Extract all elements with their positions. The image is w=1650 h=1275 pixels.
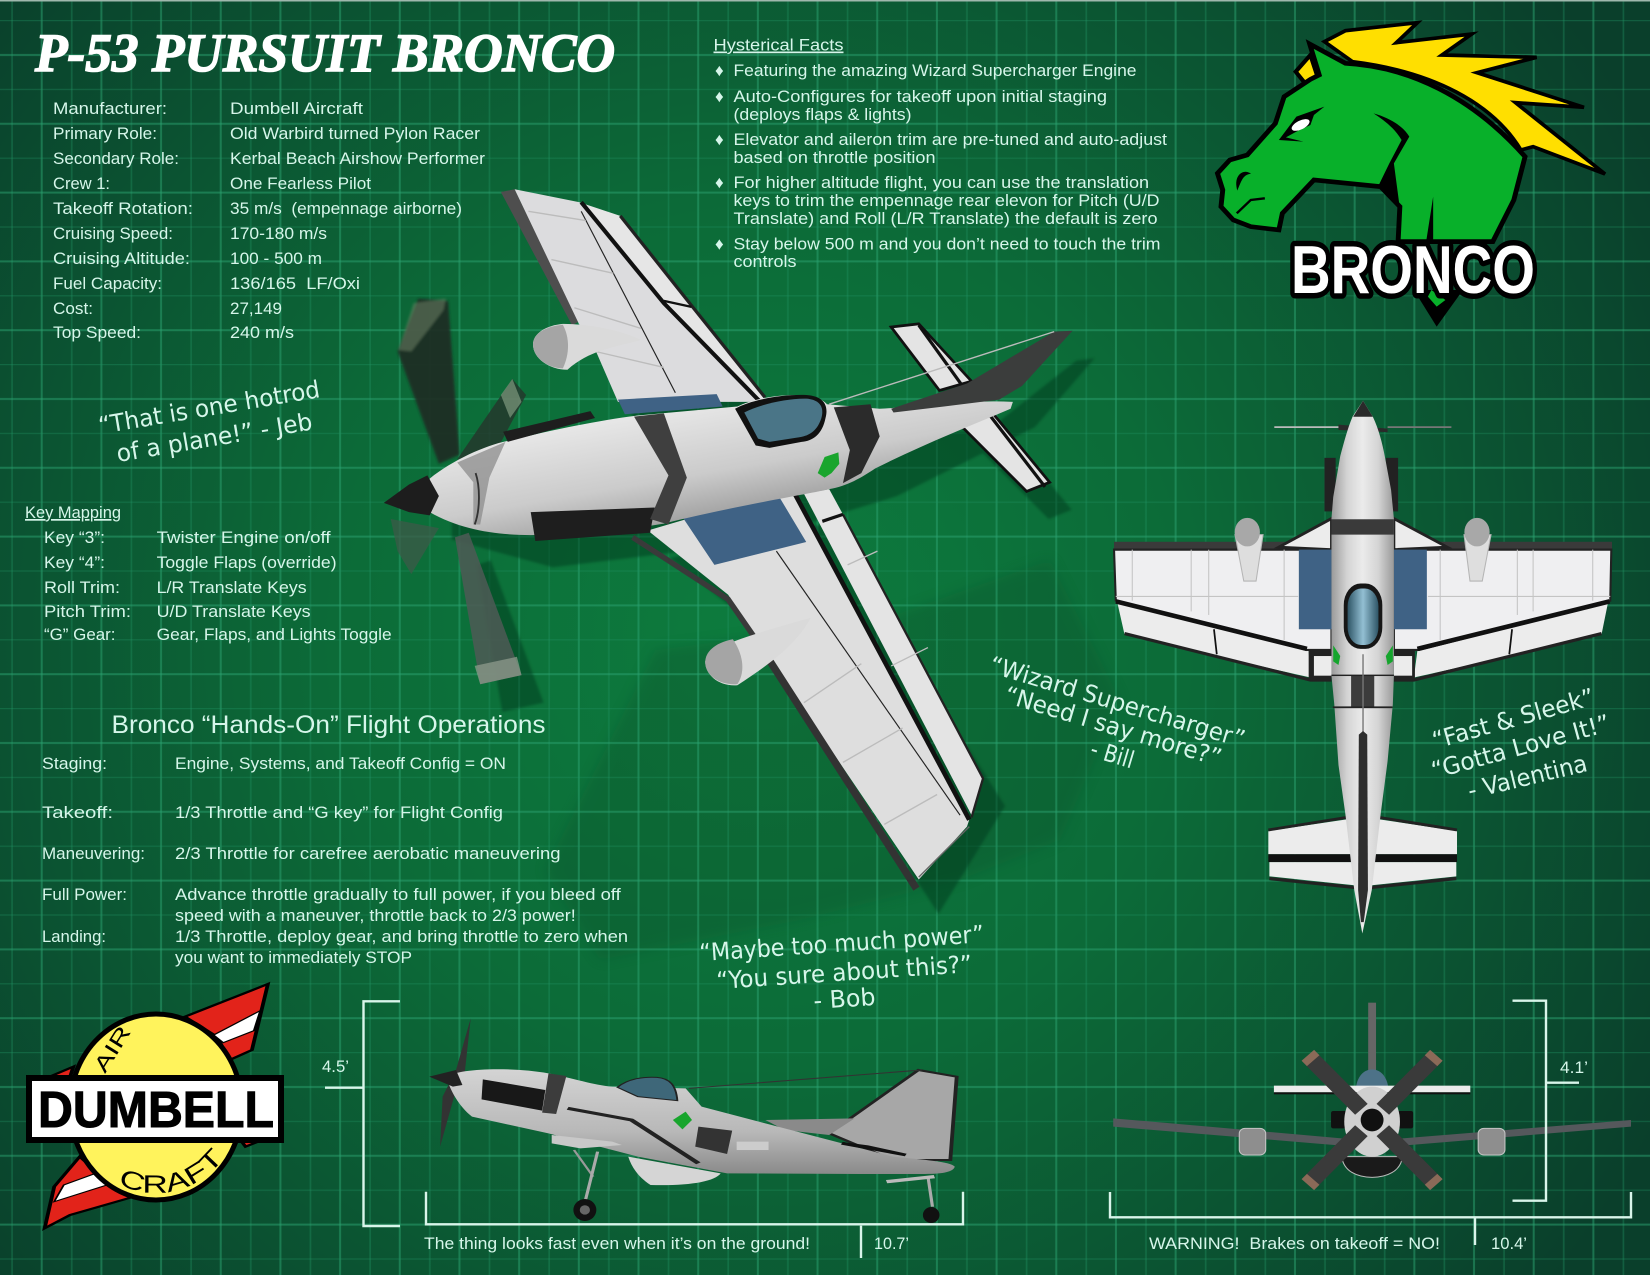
hysterical facts [714, 36, 1167, 271]
quote: bob: “Maybe too much power” [699, 920, 985, 967]
front view plane [1113, 1003, 1631, 1185]
specifications table: Cruising Altitude: [53, 249, 190, 268]
specifications table: Fuel Capacity: [53, 274, 162, 293]
logo disc [70, 1014, 242, 1200]
quote: valentina [1428, 683, 1613, 805]
specifications table [53, 99, 485, 342]
logo air: AIR [90, 1022, 136, 1077]
key mapping: Key “3”: [44, 528, 105, 547]
top propeller [1274, 425, 1451, 432]
quote: bill: - Bill [1087, 735, 1137, 774]
logo banner [29, 1078, 281, 1140]
key mapping: Pitch Trim: [44, 602, 131, 621]
quote: bill: “Need I say more?” [1001, 681, 1225, 772]
flight operations: 1/3 Throttle, deploy gear, and bring throttle to zero when [175, 927, 628, 946]
specifications table: Kerbal Beach Airshow Performer [230, 149, 485, 168]
front radiators and belly [1331, 1087, 1413, 1177]
specifications table: Dumbell Aircraft [230, 99, 363, 118]
main plane view [384, 189, 1095, 914]
front wings [1113, 1118, 1631, 1146]
specifications table: Old Warbird turned Pylon Racer [230, 124, 480, 143]
specifications table: Manufacturer: [53, 99, 167, 118]
key mapping: U/D Translate Keys [157, 602, 311, 621]
logo craft: CRAFT [122, 1147, 218, 1193]
side wing and nacelle [552, 1108, 934, 1185]
hysterical facts: ♦ [715, 173, 724, 192]
flight operations: 2/3 Throttle for carefree aerobatic maneuvering [175, 844, 560, 863]
specifications table: 170-180 m/s [230, 224, 327, 243]
specifications table: Top Speed: [53, 323, 141, 342]
front view dimensions: 4.1’ [1560, 1058, 1588, 1077]
quote: jeb: “That is one hotrod [96, 375, 322, 440]
key mapping: Roll Trim: [44, 578, 120, 597]
side spinner [429, 1070, 462, 1087]
hysterical facts: ♦ [715, 130, 724, 149]
hysterical facts: ♦ [715, 234, 724, 254]
hysterical facts: Translate) and Roll (L/R Translate) the default is zero [734, 209, 1158, 228]
specifications table: Secondary Role: [53, 149, 179, 168]
front view dimensions: 10.4’ [1491, 1234, 1527, 1253]
side canopy [617, 1077, 677, 1101]
wing panels [1114, 519, 1612, 680]
hysterical facts: based on throttle position [734, 148, 936, 167]
side propeller [440, 1018, 471, 1147]
quote: bob: - Bob [813, 983, 876, 1015]
specifications table: 136/165 LF/Oxi [230, 274, 360, 293]
propeller lower blade [455, 533, 522, 684]
quote: valentina: “Fast & Sleek” [1429, 683, 1597, 755]
side view plane [429, 1018, 957, 1223]
key mapping: Gear, Flaps, and Lights Toggle [157, 625, 392, 644]
front fin [1368, 1003, 1376, 1071]
logo wings [45, 984, 268, 1228]
logo name: DUMBELL [38, 1081, 274, 1138]
flight operations: 1/3 Throttle and “G key” for Flight Config [175, 803, 503, 822]
hysterical facts: Hysterical Facts [714, 36, 844, 54]
stabilisers [1268, 817, 1457, 888]
propeller side blade [391, 379, 526, 574]
hysterical facts: controls [734, 252, 796, 271]
front stabiliser [1274, 1086, 1470, 1094]
quote: bob [699, 920, 985, 1015]
hysterical facts: ♦ [715, 87, 724, 106]
hysterical facts: Elevator and aileron trim are pre-tuned and auto-adjust [734, 130, 1167, 149]
flight operations: Maneuvering: [42, 844, 145, 863]
flight operations: Takeoff: [42, 803, 113, 822]
specifications table: Cost: [53, 299, 93, 318]
lower wing [633, 489, 983, 889]
top fuselage [1331, 401, 1394, 934]
front nacelles [1239, 1128, 1505, 1155]
bronco wordmark: BRONCO [1291, 232, 1535, 308]
top canopy [1344, 584, 1382, 649]
key mapping: Key Mapping [25, 503, 121, 522]
wing nacelles [533, 324, 811, 685]
flight operations: you want to immediately STOP [175, 948, 412, 967]
side view dimensions: 10.7’ [874, 1234, 909, 1253]
hysterical facts: ♦ [715, 61, 724, 80]
specifications table: Crew 1: [53, 174, 110, 193]
side view dimensions: The thing looks fast even when it’s on the ground! [424, 1234, 810, 1253]
side fuselage details [482, 1073, 906, 1155]
quote: jeb [96, 375, 322, 468]
solar panels [1299, 550, 1427, 629]
hysterical facts: (deploys flaps & lights) [734, 105, 912, 124]
side fuselage [446, 1069, 955, 1174]
specifications table: Primary Role: [53, 124, 157, 143]
top view plane [1114, 401, 1612, 934]
specifications table: 100 - 500 m [230, 249, 322, 268]
side landing gear [573, 1150, 939, 1223]
flight operations: speed with a maneuver, throttle back to 2/3 power! [175, 906, 576, 925]
front view dimensions [1110, 1001, 1631, 1253]
horse head drawing [1217, 23, 1605, 327]
plane drop shadow [452, 217, 1095, 914]
hysterical facts: Featuring the amazing Wizard Supercharger Engine [734, 61, 1136, 80]
key mapping: Twister Engine on/off [157, 528, 331, 547]
quote: jeb: of a plane!” - Jeb [114, 408, 314, 468]
key mapping: Key “4”: [44, 553, 105, 572]
specifications table: 240 m/s [230, 323, 294, 342]
spinner [384, 475, 439, 515]
top nacelles [1235, 518, 1491, 581]
side tail fin [689, 1070, 957, 1160]
hysterical facts: Auto-Configures for takeoff upon initial staging [734, 87, 1107, 106]
bronco horse logo [1217, 23, 1605, 327]
hysterical facts: keys to trim the empennage rear elevon for Pitch (U/D [734, 191, 1160, 210]
quote: valentina: “Gotta Love It!” [1428, 709, 1613, 785]
canopy [735, 395, 826, 448]
quote: bill: “Wizard Supercharger” [986, 651, 1248, 753]
front canopy [1356, 1069, 1388, 1087]
front view dimensions: WARNING! Brakes on takeoff = NO! [1149, 1234, 1440, 1253]
specifications table: 35 m/s (empennage airborne) [230, 199, 462, 218]
hysterical facts: For higher altitude flight, you can use the translation [734, 173, 1149, 192]
side view dimensions: 4.5’ [322, 1057, 349, 1076]
fuselage horse badge [818, 452, 839, 478]
specifications table: 27,149 [230, 299, 282, 318]
fuselage markings [1331, 519, 1394, 922]
hysterical facts: Stay below 500 m and you don’t need to touch the trim [734, 234, 1160, 254]
quote: valentina: - Valentina [1465, 749, 1590, 805]
flight operations: Landing: [42, 927, 106, 946]
specifications table: One Fearless Pilot [230, 174, 371, 193]
title: P-53 PURSUIT BRONCO [34, 23, 615, 83]
quote: bob: “You sure about this?” [716, 950, 973, 995]
flight operations: Engine, Systems, and Takeoff Config = ON [175, 754, 506, 773]
nose cone [1353, 401, 1373, 417]
tail stabilisers [891, 324, 1050, 491]
upper wing [501, 189, 765, 414]
specifications table: Takeoff Rotation: [53, 199, 193, 218]
front spinner [1361, 1109, 1384, 1131]
front propeller [1308, 1055, 1436, 1185]
flight operations: Advance throttle gradually to full power, if you bleed off [175, 885, 621, 904]
flight operations: Full Power: [42, 885, 127, 904]
key mapping [25, 503, 392, 644]
flight operations: Bronco “Hands-On” Flight Operations [112, 711, 546, 739]
key mapping: L/R Translate Keys [157, 578, 307, 597]
flight operations: Staging: [42, 754, 107, 773]
key mapping: “G” Gear: [44, 625, 116, 644]
fuselage [430, 331, 1073, 541]
top radiators [1324, 458, 1398, 511]
dumbell aircraft logo [26, 982, 284, 1231]
propeller upper blade [398, 299, 460, 464]
side view dimensions [322, 1001, 963, 1258]
flight operations [42, 711, 628, 967]
key mapping: Toggle Flaps (override) [157, 553, 337, 572]
specifications table: Cruising Speed: [53, 224, 173, 243]
